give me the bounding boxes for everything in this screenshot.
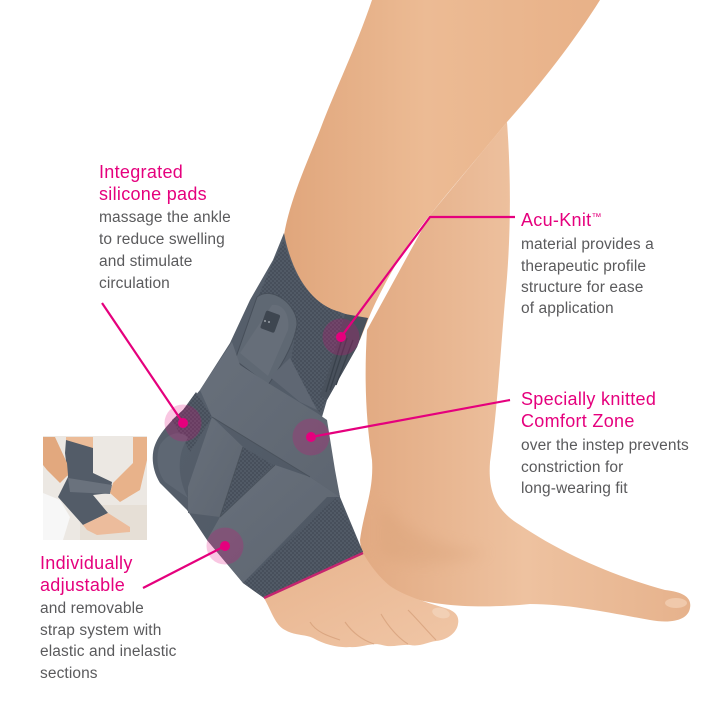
heading: ™ xyxy=(591,212,602,223)
callout: Acu-Knit: of application xyxy=(521,300,614,317)
callout: comfort zone xyxy=(292,389,689,497)
callout: integrated silicone pads xyxy=(99,162,231,442)
pink trim xyxy=(264,553,363,598)
silicone pad and velcro tab xyxy=(235,293,317,410)
callout: comfort zone: Comfort Zone xyxy=(521,411,635,431)
callout: individually adjustable: sections xyxy=(40,665,98,682)
marker xyxy=(206,528,244,564)
marker xyxy=(292,418,330,456)
callout: comfort zone: constriction for xyxy=(521,459,623,476)
heading: Acu-Knit xyxy=(521,210,591,230)
heading: Specially knitted xyxy=(521,389,656,409)
description: over the instep prevents xyxy=(521,437,689,454)
callout: Acu-Knit xyxy=(322,210,654,356)
illustration: legs and ankle brace xyxy=(153,0,690,647)
elastic straps xyxy=(188,342,340,583)
marker xyxy=(322,318,360,356)
callout: individually adjustable: strap system with xyxy=(40,622,161,639)
callout: Acu-Knit: structure for ease xyxy=(521,279,643,296)
callout: integrated silicone pads: and stimulate xyxy=(99,253,192,270)
callout: integrated silicone pads: to reduce swelling xyxy=(99,231,225,248)
callout: integrated silicone pads: circulation xyxy=(99,275,170,292)
strap: vertical left xyxy=(188,417,243,517)
heading: Integrated xyxy=(99,162,183,182)
description: material provides a xyxy=(521,236,654,253)
callout: comfort zone: long-wearing fit xyxy=(521,480,628,497)
strap: upper diagonal xyxy=(200,342,340,497)
callout: individually adjustable xyxy=(40,528,244,682)
marker xyxy=(164,404,202,442)
heading: Individually xyxy=(40,553,133,573)
callout: Acu-Knit: therapeutic profile xyxy=(521,258,646,275)
front foot xyxy=(264,553,458,647)
callout: integrated silicone pads: silicone pads xyxy=(99,184,207,204)
description: massage the ankle xyxy=(99,209,231,226)
callout: individually adjustable: elastic and inelastic xyxy=(40,643,177,660)
inset photo: applying the strap xyxy=(43,436,147,540)
callout: individually adjustable: adjustable xyxy=(40,575,125,595)
strap: lower diagonal xyxy=(207,465,340,583)
rear leg and foot xyxy=(360,122,690,622)
description: and removable xyxy=(40,600,144,617)
ankle brace: knitted sleeve xyxy=(153,233,368,598)
front leg xyxy=(284,0,600,340)
